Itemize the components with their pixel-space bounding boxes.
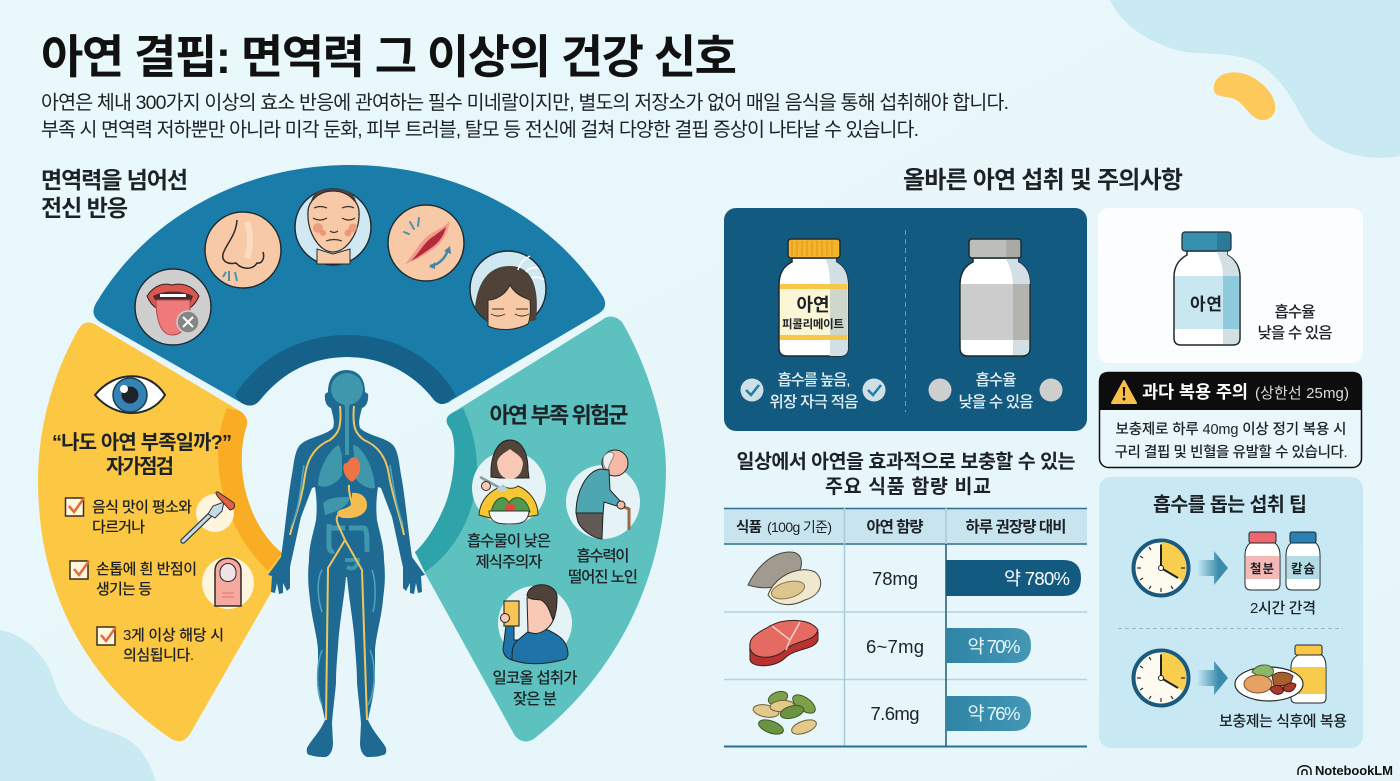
icon: elderly person <box>566 450 640 539</box>
steak values <box>866 628 1031 663</box>
logo: NotebookLM: NotebookLM <box>1315 763 1393 778</box>
checklist item 2: 손톱에 흰 반점이 <box>96 561 197 578</box>
warning heading: 과다 복용 주의 <box>1142 382 1248 402</box>
decorative yellow bean <box>1214 72 1275 120</box>
heading: self check: “나도 아연 부족일까?” <box>52 431 232 454</box>
seeds values: 약 76% <box>968 703 1020 724</box>
icon: nose <box>205 212 281 288</box>
label: drinkers: 일코올 섭취가 <box>492 669 578 687</box>
label: low absorption: 낮을 수 있음 <box>958 393 1034 411</box>
icon: fork <box>183 492 234 541</box>
heading: self check <box>52 431 232 478</box>
icon: blue cap bottle: 아연 <box>1190 295 1222 314</box>
label: drinkers <box>492 669 578 708</box>
checklist item 1 <box>66 498 192 536</box>
panel: overdose warning <box>1099 372 1362 468</box>
table: zinc content <box>724 508 1087 746</box>
icon: steak <box>750 620 818 666</box>
label: low absorption: 흡수율 <box>1274 303 1316 321</box>
icon: hair loss <box>470 251 546 330</box>
label: take after meal: 보충제는 식후에 복용 <box>1219 713 1347 730</box>
icon: generic grey bottle <box>960 239 1030 356</box>
heading: whole body response: 전신 반응 <box>41 195 128 221</box>
icon: check marks <box>740 378 886 402</box>
arrow 2 <box>1197 661 1228 695</box>
arrow 1 <box>1197 551 1228 585</box>
panel: absorption tips <box>1099 477 1363 748</box>
icon: tongue <box>135 269 211 345</box>
oysters values: 약 780% <box>1004 568 1070 589</box>
icon: chelated zinc bottle: 아연 <box>796 295 830 315</box>
panel: self check (yellow arc) <box>38 322 284 741</box>
label: 2 hours apart: 2시간 간격 <box>1250 600 1316 617</box>
icon: iron and calcium bottles <box>1245 532 1320 590</box>
intro text: 아연은 체내 300가지 이상의 효소 반응에 관여하는 필수 미네랄이지만, 별도의 저장소가 없어 매일 음식을 통해 섭취해야 합니다. <box>41 92 1009 114</box>
table header: (100g 기준) <box>767 519 832 535</box>
heading: correct intake: 올바른 아연 섭취 및 주의사항 <box>903 167 1183 194</box>
label: elderly: 흡수력이 <box>576 547 630 565</box>
oysters values <box>872 560 1081 596</box>
icon: chelated zinc bottle <box>779 239 848 356</box>
steak values: 약 70% <box>968 636 1020 657</box>
checklist item 3: 3게 이상 해당 시 <box>123 627 224 644</box>
warning heading <box>1142 382 1349 402</box>
label: high absorption: 흡수를 높음, <box>778 371 850 389</box>
panel: zinc bottle comparison <box>724 208 1087 431</box>
tips heading: 흡수를 돕는 섭취 팁 <box>1153 494 1307 516</box>
icon: vegetarian person <box>472 440 546 525</box>
icon: oysters <box>748 552 821 605</box>
checklist item 2 <box>70 561 197 598</box>
oysters values: 78mg <box>872 568 918 589</box>
checklist item 1: 다르거나 <box>92 519 145 536</box>
panel: whole body symptoms (blue arc) <box>93 165 605 406</box>
human body illustration <box>268 370 425 757</box>
steak values: 6~7mg <box>866 636 924 657</box>
table header: 하루 권장량 대비 <box>966 518 1066 536</box>
heading: self check: 자가점검 <box>106 455 174 478</box>
icon: iron and calcium bottles: 칼슘 <box>1291 562 1315 576</box>
icon: warning triangle <box>1112 381 1136 403</box>
warning body: 구리 결핍 및 빈혈을 유발할 수 있습니다. <box>1114 444 1348 461</box>
label: high absorption: 위장 자극 적음 <box>770 393 858 411</box>
label: drinkers: 잦은 분 <box>513 690 557 708</box>
table header: 식품 <box>736 519 762 536</box>
label: vegetarian: 제식주의자 <box>476 553 542 571</box>
title: 아연 결핍: 면역력 그 이상의 건강 신호 <box>41 31 737 83</box>
panel: at-risk groups (teal arc) <box>415 316 666 742</box>
icon: clock 2 <box>1134 650 1188 706</box>
label: low absorption <box>958 371 1034 411</box>
table header: 아연 함량 <box>866 518 924 536</box>
heading: whole body response: 면역력을 넘어선 <box>41 167 188 193</box>
warning body <box>1114 421 1348 461</box>
label: elderly: 떨어진 노인 <box>568 568 638 586</box>
icon: eye <box>95 376 165 413</box>
icon: face with rash <box>295 189 371 265</box>
icon: clock 1 <box>1134 540 1188 596</box>
warning heading: (상한선 25mg) <box>1255 385 1349 402</box>
icon: pumpkin seeds <box>752 689 818 737</box>
label: high absorption <box>770 371 858 411</box>
checklist item 2: 생기는 등 <box>96 581 152 598</box>
icon: blue cap bottle <box>1174 232 1240 345</box>
label: low absorption: 낮을 수 있음 <box>1258 324 1332 342</box>
table header <box>736 518 1066 536</box>
label: elderly <box>568 547 638 586</box>
icon: person drinking <box>498 585 572 664</box>
heading: food comparison: 주요 식품 함량 비교 <box>825 476 991 498</box>
warning body: 보충제로 하루 40mg 이상 정기 복용 시 <box>1116 421 1346 438</box>
icon: skin wound <box>388 205 464 281</box>
intro text: 부족 시 면역력 저하뿐만 아니라 미각 둔화, 피부 트러블, 탈모 등 전신에 걸쳐 다양한 결핍 증상이 나타날 수 있습니다. <box>41 119 919 141</box>
label: low absorption <box>1258 303 1332 342</box>
intro text <box>41 92 1009 141</box>
icon: grey dots <box>928 378 1062 402</box>
heading: food comparison: 일상에서 아연을 효과적으로 보충할 수 있는 <box>736 451 1076 473</box>
checklist item 3 <box>97 627 224 664</box>
heading: at-risk groups: 아연 부족 위험군 <box>490 403 628 428</box>
heading: food comparison <box>736 451 1076 498</box>
icon: fingernail <box>202 557 254 609</box>
panel: generic zinc bottle card <box>1098 208 1363 363</box>
label: low absorption: 흡수율 <box>976 371 1016 389</box>
seeds values <box>870 696 1031 731</box>
icon: meal and supplement <box>1235 645 1326 703</box>
label: vegetarian: 흡수물이 낮은 <box>467 532 551 550</box>
icon: iron and calcium bottles: 철분 <box>1250 562 1274 576</box>
checklist item 1: 음식 맛이 평소와 <box>92 499 192 516</box>
label: vegetarian <box>467 532 551 571</box>
seeds values: 7.6mg <box>870 703 920 724</box>
icon: chelated zinc bottle: 피콜리메이트 <box>782 317 844 331</box>
heading: whole body response <box>41 167 188 221</box>
checklist item 3: 의심됩니다. <box>123 647 194 664</box>
